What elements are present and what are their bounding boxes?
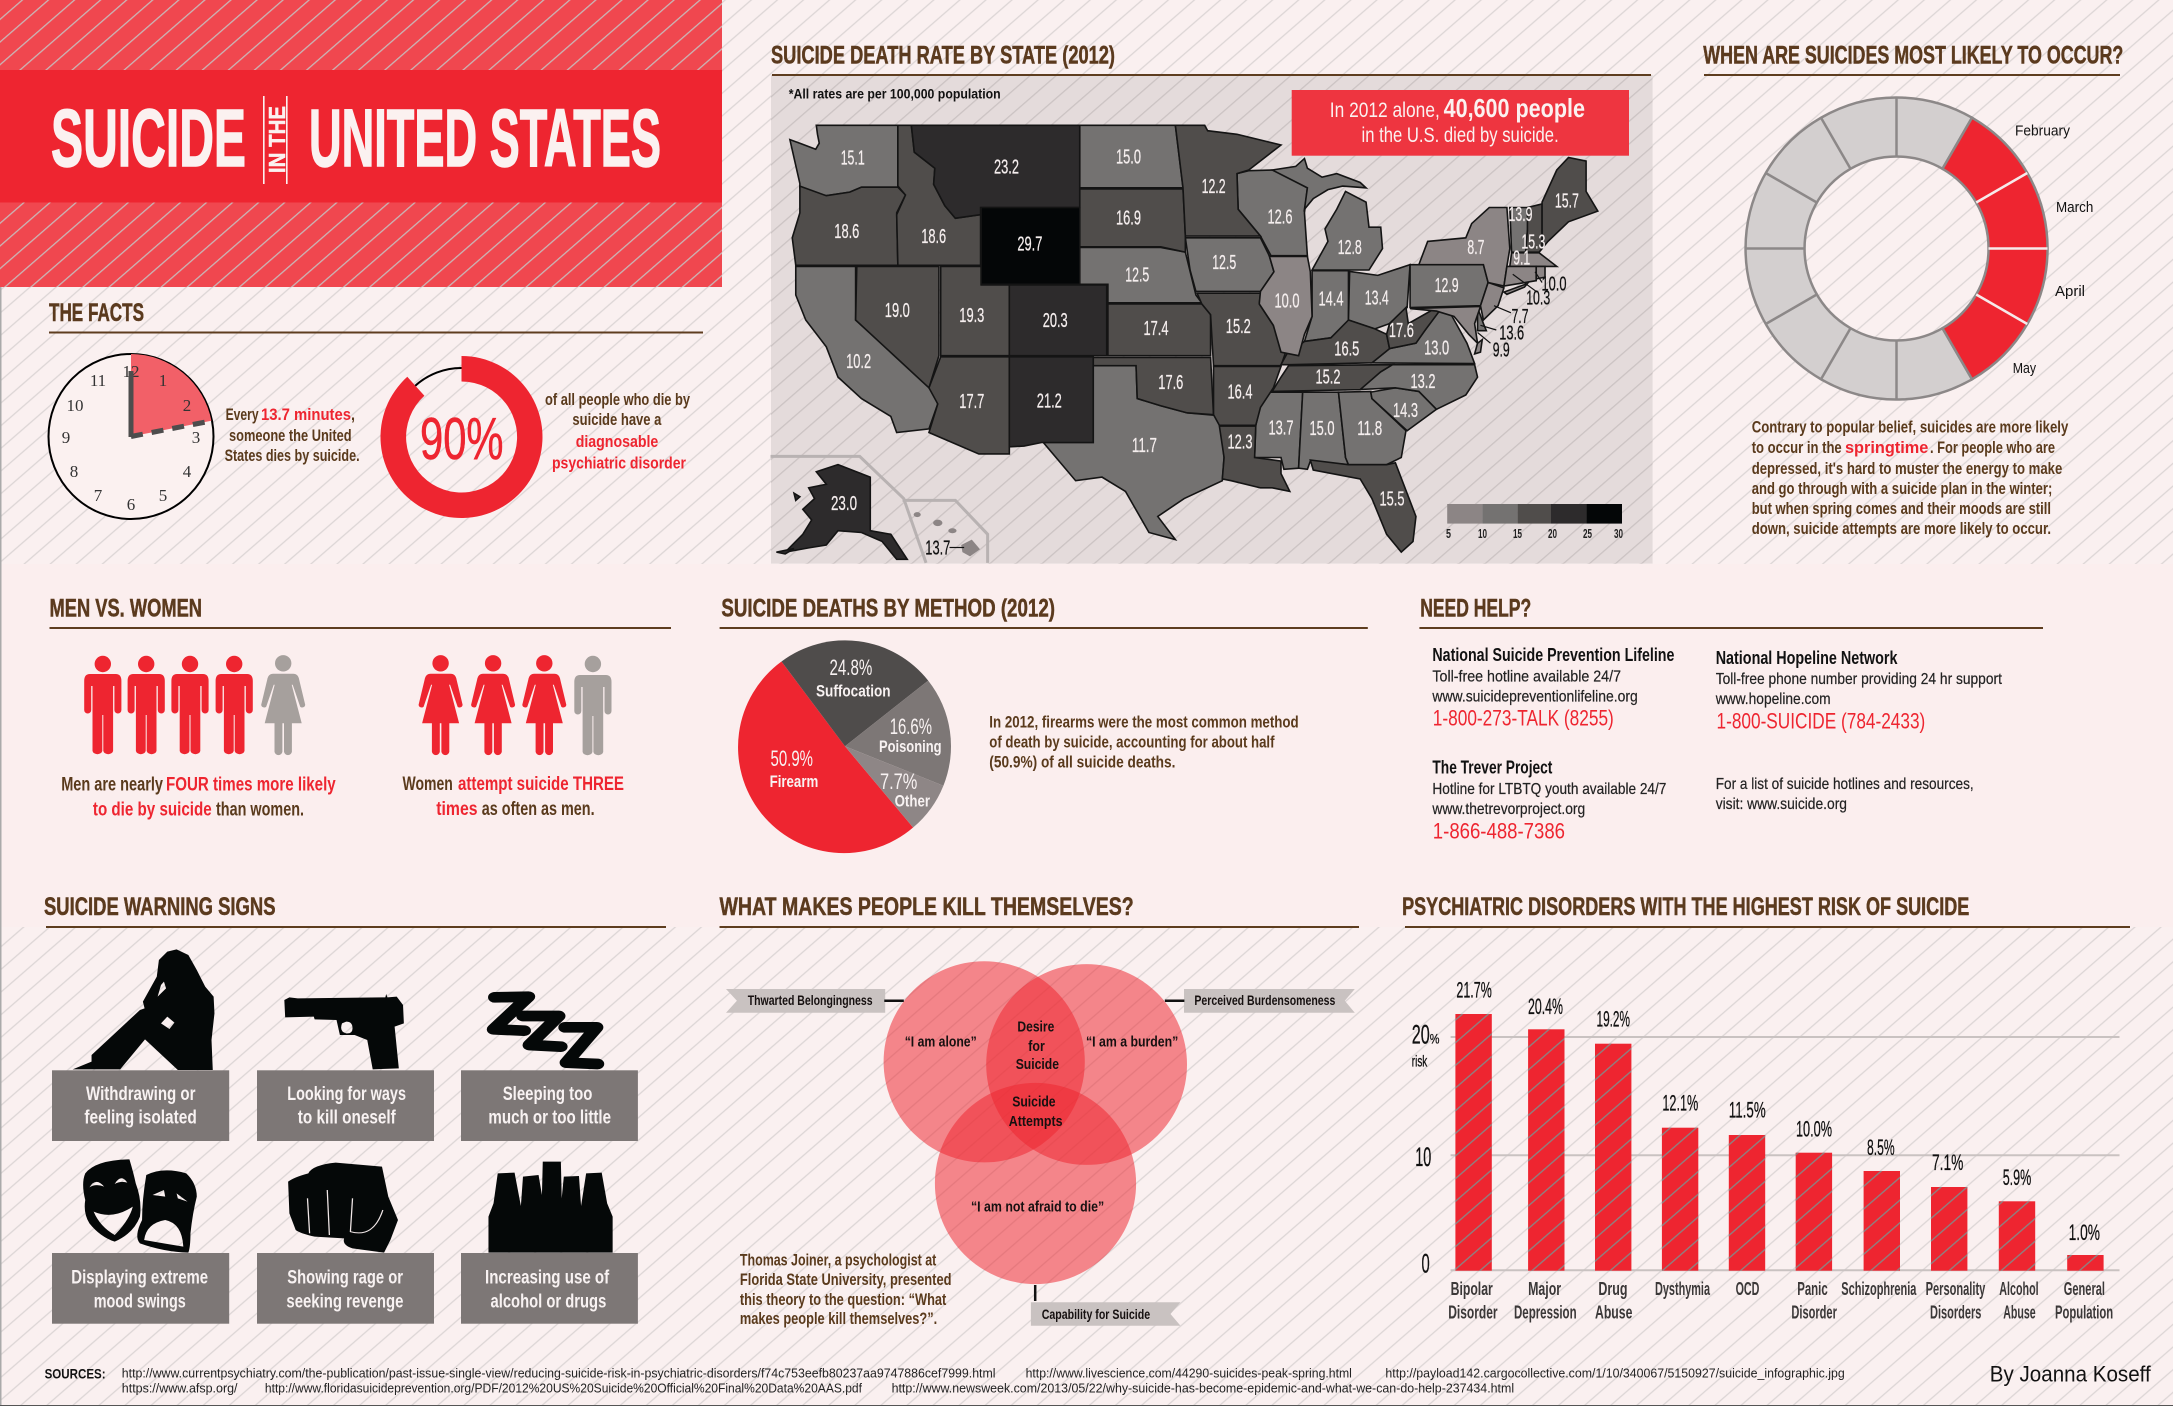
ribbon: thwarted belongingness — [726, 989, 904, 1013]
bar value labels: 5.9% — [2003, 1165, 2031, 1190]
icon: three women one man — [419, 655, 612, 755]
map: inset borders and hawaii — [771, 272, 1542, 563]
map: state rate labels: 14.3 — [1393, 400, 1418, 422]
text: firearms explanation: of death by suicide, accounting for about half — [989, 733, 1275, 752]
chart: method pie: Firearm — [770, 772, 818, 791]
card: withdrawing: feeling isolated — [84, 1107, 197, 1128]
panel: the facts — [48, 299, 703, 519]
icon: clock: 11 — [90, 371, 106, 390]
map: state rate labels: 16.5 — [1334, 339, 1359, 361]
text: thomas joiner: Florida State University, presented — [740, 1270, 952, 1289]
chart: venn diagram: “I am a burden” — [1086, 1034, 1178, 1051]
sources: http://www.newsweek.com/2013/05/22/why-suicide-has-become-epidemic-and-what-we-can-do-help-237434.html — [892, 1380, 1514, 1395]
icon: handgun — [284, 994, 404, 1069]
resource: hopeline network: www.hopeline.com — [1715, 691, 1831, 708]
chart: method pie: Other — [895, 792, 930, 811]
text: psychiatric disorder: of all people who die by — [545, 390, 690, 409]
heading: deaths by method: SUICIDE DEATHS BY METHOD (2012) — [721, 595, 1055, 623]
ribbon: thwarted belongingness: Thwarted Belongingness — [748, 992, 873, 1008]
heading: psychiatric disorders: PSYCHIATRIC DISORDERS WITH THE HIGHEST RISK OF SUICIDE — [1402, 893, 1969, 921]
text: psychiatric disorder — [545, 390, 690, 473]
bar category labels — [1448, 1279, 2113, 1322]
text: psychiatric disorder: diagnosable — [576, 432, 658, 451]
text: every 13.7 minutes: States dies by suicide. — [225, 446, 360, 465]
card: sleeping — [461, 1070, 638, 1141]
map: state rate labels: 13.0 — [1424, 338, 1449, 360]
icon: clock — [48, 354, 214, 519]
map: state rate labels: 12.5 — [1212, 252, 1236, 274]
map: state rate labels: 14.4 — [1318, 289, 1344, 311]
text: men four times: to die by suicide — [93, 800, 212, 821]
text: firearms explanation: In 2012, firearms were the most common method — [989, 713, 1299, 732]
bar value labels: 11.5% — [1729, 1098, 1766, 1123]
text: every 13.7 minutes — [225, 405, 360, 465]
resource: trevor project: www.thetrevorproject.org — [1432, 801, 1585, 818]
heading: warning signs: SUICIDE WARNING SIGNS — [44, 893, 276, 921]
resource: trevor project: 1-866-488-7386 — [1433, 818, 1565, 843]
heading: what makes people: WHAT MAKES PEOPLE KILL THEMSELVES? — [720, 893, 1134, 921]
bar value labels: 10.0% — [1796, 1117, 1832, 1142]
map: state rate labels: 18.6 — [834, 221, 859, 243]
heading: death rate by state: SUICIDE DEATH RATE BY STATE (2012) — [771, 42, 1115, 70]
heading: need help: NEED HELP? — [1420, 595, 1531, 623]
icon: isolated person — [73, 949, 214, 1070]
heading: the facts: THE FACTS — [49, 299, 144, 327]
map: state rate labels: 12.8 — [1338, 237, 1362, 259]
heading: men vs women: MEN VS. WOMEN — [50, 595, 202, 623]
bar value labels: 7.1% — [1932, 1150, 1963, 1175]
card: looking for ways — [257, 1070, 434, 1141]
map: state rate labels: 16.4 — [1228, 382, 1252, 404]
map: state rate labels: 23.0 — [831, 493, 857, 515]
icon: clock: 12 — [122, 362, 140, 381]
map: state rate labels: 29.7 — [1017, 233, 1042, 255]
axis labels: 0 — [1422, 1249, 1430, 1279]
text: every 13.7 minutes: someone the United — [229, 426, 352, 445]
map: state rate labels: 17.6 — [1158, 372, 1183, 394]
chart: 90 percent ring — [380, 356, 542, 518]
card: looking for ways: Looking for ways — [287, 1084, 406, 1105]
map: state rate labels: 10.0 — [1542, 273, 1566, 295]
sources: http://www.currentpsychiatry.com/the-publication/past-issue-single-view/reducing-suicide-risk-in-psychiatric-disorders/f74c753eefb80237aa9747886cef7999.html — [122, 1365, 996, 1380]
panel: warning signs — [44, 893, 666, 1324]
map: state rate labels: 17.4 — [1144, 318, 1168, 340]
map: state rate labels: 9.9 — [1493, 339, 1510, 361]
labels: months: April — [2055, 283, 2085, 300]
resource: prevention lifeline — [1432, 645, 1674, 731]
map: state rate labels — [831, 147, 1579, 560]
bar value labels: 19.2% — [1596, 1007, 1630, 1032]
card: mood swings — [52, 1253, 229, 1324]
map: state rate labels: 12.3 — [1228, 432, 1252, 454]
icon: fist — [288, 1163, 398, 1253]
resource: suicide.org — [1716, 776, 1974, 813]
text: springtime explanation: down, suicide attempts are more likely to occur. — [1752, 519, 2051, 538]
bar category labels: Abuse — [1595, 1302, 1632, 1322]
bar value labels: 8.5% — [1867, 1135, 1895, 1160]
bar category labels: Drug — [1598, 1279, 1628, 1299]
ribbon: perceived burdensomeness — [1165, 989, 1355, 1013]
map: state rate labels: 20.3 — [1043, 310, 1068, 332]
map: state rate labels: 17.7 — [959, 391, 984, 413]
resource: hopeline network: National Hopeline Network — [1716, 648, 1898, 668]
bar value labels — [1456, 977, 2100, 1245]
panel: men vs women — [50, 595, 671, 821]
text: men four times: FOUR times more likely — [166, 775, 336, 796]
legend: rate scale: 10 — [1478, 526, 1487, 541]
note: rates per 100,000: *All rates are per 100,000 population — [789, 86, 1001, 102]
bar category labels: Personality — [1926, 1279, 1985, 1299]
icon: clock: 2 — [183, 396, 191, 415]
panel: when are suicides most likely — [1703, 42, 2123, 538]
resource: hopeline network: 1-800-SUICIDE (784-2433) — [1716, 708, 1925, 733]
card: alcohol or drugs: alcohol or drugs — [490, 1291, 606, 1312]
map: state rate labels: 17.6 — [1389, 320, 1414, 342]
text: women three times: attempt suicide THREE — [458, 774, 624, 795]
ribbon: capability for suicide: Capability for Suicide — [1042, 1306, 1150, 1322]
legend: rate scale: 20 — [1548, 526, 1557, 541]
text: women three times: as often as men. — [482, 799, 595, 820]
bar category labels: Alcohol — [1999, 1279, 2039, 1299]
icon: clock: 8 — [70, 462, 78, 481]
bar category labels: Abuse — [2003, 1302, 2036, 1322]
map: state rate labels: 15.0 — [1116, 147, 1141, 169]
chart: method pie: Poisoning — [879, 737, 942, 756]
chart: venn diagram: “I am alone” — [905, 1034, 977, 1051]
panel: what makes people kill themselves — [720, 893, 1359, 1328]
chart: method pie: 24.8% — [830, 655, 872, 680]
map: state rate labels: 9.1 — [1513, 248, 1530, 270]
chart: risk bars — [1451, 1014, 2120, 1271]
sources: SOURCES: — [45, 1365, 106, 1381]
map: state rate labels: 15.3 — [1521, 232, 1545, 254]
map: state rate labels: 19.3 — [959, 305, 984, 327]
map: state rate labels: 12.6 — [1268, 207, 1292, 229]
chart: venn diagram: Suicide — [1016, 1056, 1059, 1073]
map: state rate labels: 13.6 — [1499, 323, 1524, 345]
axis labels: risk — [1412, 1054, 1428, 1071]
map: state rate labels: 8.7 — [1467, 237, 1484, 259]
bar category labels: Schizophrenia — [1841, 1279, 1917, 1299]
axis labels: % — [1430, 1030, 1439, 1046]
text: springtime explanation: depressed, it's hard to muster the energy to make — [1752, 459, 2062, 478]
map: state rate labels: 18.6 — [921, 226, 946, 248]
card: sleeping: Sleeping too — [503, 1084, 592, 1105]
icon: clock: 10 — [66, 396, 84, 415]
chart: venn diagram — [884, 961, 1187, 1284]
card: rage: Showing rage or — [287, 1267, 403, 1288]
text: men four times: Men are nearly — [61, 775, 163, 796]
text: psychiatric disorder: psychiatric disorder — [552, 454, 686, 473]
chart: method pie — [738, 640, 951, 853]
map: state rate labels: 19.0 — [885, 300, 910, 322]
icon: clock: 6 — [127, 495, 135, 514]
callout: 40,600 people: in the U.S. died by suicide. — [1362, 124, 1559, 147]
legend: rate scale: 30 — [1614, 526, 1623, 541]
resource: trevor project — [1432, 757, 1666, 843]
panel: need help — [1419, 595, 2043, 843]
resource: prevention lifeline: National Suicide Prevention Lifeline — [1432, 645, 1674, 665]
icon: clock: 7 — [94, 486, 103, 505]
bar category labels: Disorders — [1930, 1302, 1981, 1322]
resource: prevention lifeline: Toll-free hotline available 24/7 — [1432, 669, 1621, 686]
chart: venn diagram: “I am not afraid to die” — [971, 1199, 1104, 1216]
map: state rate labels: 10.2 — [846, 351, 871, 373]
bar value labels: 1.0% — [2069, 1220, 2100, 1245]
icon: clock: 9 — [62, 428, 70, 447]
text: springtime explanation: but when spring comes and their moods are still — [1752, 499, 2051, 518]
labels: months: May — [2013, 360, 2036, 377]
bar value labels: 20.4% — [1528, 994, 1563, 1019]
panel: suicide death rate by state — [771, 42, 1653, 564]
sources: http://www.floridasuicideprevention.org/PDF/2012%20US%20Suicide%20Official%20Final%20Data%20AAS.pdf — [265, 1380, 862, 1395]
chart: monthly donut — [1746, 97, 2048, 399]
icon: bottles — [488, 1162, 613, 1253]
resource: trevor project: Hotline for LTBTQ youth available 24/7 — [1432, 781, 1666, 798]
sources: http://www.livescience.com/44290-suicides-peak-spring.html — [1026, 1365, 1352, 1380]
text: every 13.7 minutes: , — [351, 405, 355, 424]
text: springtime explanation: to occur in the — [1752, 438, 1842, 457]
chart: method pie: 16.6% — [890, 714, 932, 739]
text: firearms explanation: (50.9%) of all suicide deaths. — [989, 753, 1175, 772]
card: withdrawing: Withdrawing or — [86, 1084, 196, 1105]
title: suicide: SUICIDE — [51, 93, 246, 184]
icon: theatre masks — [83, 1159, 197, 1253]
bar value labels: 21.7% — [1456, 977, 1492, 1002]
chart: 90 percent ring: 90% — [420, 406, 504, 472]
legend: rate scale: 5 — [1446, 526, 1451, 541]
chart: method pie: 7.7% — [880, 769, 917, 794]
map: state rate labels: 15.7 — [1555, 190, 1579, 212]
bar category labels: Dysthymia — [1655, 1279, 1711, 1299]
map: state rate labels: 13.4 — [1365, 288, 1389, 310]
map: state rate labels: 10.3 — [1526, 288, 1550, 310]
map: state shapes — [776, 125, 1598, 559]
text: thomas joiner: Thomas Joiner, a psychologist at — [740, 1251, 937, 1270]
title: in the: IN THE — [264, 106, 290, 173]
bar category labels: Population — [2055, 1302, 2113, 1322]
card: looking for ways: to kill oneself — [298, 1107, 396, 1128]
bar category labels: OCD — [1736, 1279, 1759, 1299]
panel: psychiatric disorders — [1402, 893, 2130, 1322]
card: withdrawing — [52, 1070, 229, 1141]
card: sleeping: much or too little — [488, 1107, 611, 1128]
resource: trevor project: The Trever Project — [1432, 757, 1552, 777]
title: united states: UNITED STATES — [309, 93, 661, 184]
map: state rate labels: 15.1 — [841, 148, 865, 170]
text: thomas joiner — [740, 1251, 952, 1328]
chart: venn diagram: for — [1028, 1038, 1045, 1055]
bar category labels: Depression — [1514, 1302, 1577, 1322]
sources — [45, 1365, 1845, 1395]
text: every 13.7 minutes: 13.7 minutes — [261, 405, 351, 424]
map: state rate labels: 15.2 — [1316, 367, 1340, 389]
map: state rate labels: 11.7 — [1132, 435, 1157, 457]
sources: https://www.afsp.org/ — [122, 1380, 238, 1395]
card: alcohol or drugs: Increasing use of — [485, 1267, 610, 1288]
legend: rate scale — [1446, 504, 1623, 541]
text: firearms explanation — [989, 713, 1299, 772]
chart: venn diagram: Suicide — [1012, 1094, 1056, 1111]
axis labels: 10 — [1415, 1142, 1431, 1172]
labels: months: February — [2015, 122, 2070, 139]
text: springtime explanation: springtime — [1845, 438, 1928, 457]
map: state rate labels: 13.2 — [1410, 371, 1436, 393]
labels: months — [2013, 122, 2093, 377]
panel: title banner — [0, 0, 722, 287]
text: men four times — [61, 775, 336, 821]
icon: four men one woman — [84, 655, 305, 755]
ribbon: capability for suicide — [1031, 1285, 1180, 1326]
icon: clock: 4 — [183, 462, 192, 481]
card: alcohol or drugs — [461, 1253, 638, 1324]
text: psychiatric disorder: suicide have a — [572, 410, 662, 429]
card: rage: seeking revenge — [286, 1291, 403, 1312]
text: springtime explanation — [1752, 418, 2069, 538]
ribbon: perceived burdensomeness: Perceived Burdensomeness — [1194, 992, 1335, 1008]
chart: method pie: Suffocation — [816, 682, 891, 701]
callout: 40,600 people: 40,600 people — [1444, 93, 1585, 123]
map: state rate labels: 16.9 — [1116, 208, 1141, 230]
map: state rate labels: 13.9 — [1508, 204, 1532, 226]
text: every 13.7 minutes: Every — [226, 405, 259, 424]
resource: hopeline network — [1715, 648, 2002, 733]
map: state rate labels: 21.2 — [1037, 390, 1062, 412]
resource: suicide.org: For a list of suicide hotlines and resources, — [1716, 776, 1974, 793]
callout: 40,600 people: In 2012 alone, — [1330, 99, 1440, 122]
legend: rate scale: 15 — [1513, 526, 1522, 541]
resource: prevention lifeline: www.suicidepreventionlifeline.org — [1432, 689, 1638, 706]
resource: suicide.org: visit: www.suicide.org — [1716, 796, 1847, 813]
axis labels: 20 — [1412, 1019, 1430, 1049]
map: state rate labels: 15.2 — [1226, 316, 1251, 338]
map: state rate labels: 23.2 — [994, 157, 1019, 179]
card: rage — [257, 1253, 434, 1324]
resource: hopeline network: Toll-free phone number providing 24 hr support — [1716, 671, 2002, 688]
bar category labels: General — [2064, 1279, 2105, 1299]
icon: clock: 1 — [159, 371, 167, 390]
text: thomas joiner: this theory to the question: “What — [740, 1290, 947, 1309]
legend: rate scale: 25 — [1583, 526, 1592, 541]
text: springtime explanation: . For people who are — [1930, 438, 2055, 457]
chart: venn diagram: Desire — [1017, 1019, 1054, 1036]
byline: By Joanna Koseff — [1990, 1362, 2152, 1387]
chart: method pie: 50.9% — [770, 746, 813, 771]
map: state rate labels: 12.5 — [1125, 264, 1149, 286]
card: mood swings: mood swings — [94, 1291, 186, 1312]
sources: http://payload142.cargocollective.com/1/10/340067/5150927/suicide_infographic.jpg — [1385, 1365, 1845, 1380]
panel: deaths by method — [720, 595, 1368, 853]
chart: venn diagram: Attempts — [1009, 1113, 1062, 1130]
bar category labels: Disorder — [1791, 1302, 1837, 1322]
labels: months: March — [2056, 199, 2093, 216]
icon: sleeping zzz — [494, 997, 597, 1064]
icon: clock: 5 — [159, 486, 167, 505]
text: women three times: times — [436, 799, 478, 820]
bar category labels: Panic — [1797, 1279, 1828, 1299]
text: men four times: than women. — [216, 800, 304, 821]
map: state rate labels: 11.8 — [1357, 418, 1382, 440]
map: state rate labels: 12.9 — [1435, 275, 1459, 297]
map: state rate labels: 15.0 — [1310, 418, 1334, 440]
callout: 40,600 people — [1292, 90, 1629, 156]
bar category labels: Bipolar — [1451, 1279, 1493, 1299]
bar category labels: Major — [1528, 1279, 1561, 1299]
bar category labels: Disorder — [1448, 1302, 1498, 1322]
icon: clock: 3 — [192, 428, 200, 447]
map: state rate labels: 13.7 — [925, 538, 950, 560]
axis labels — [1412, 1019, 1439, 1279]
map: state rate labels: 7.7 — [1512, 306, 1528, 328]
card: mood swings: Displaying extreme — [71, 1267, 208, 1288]
text: women three times: Women — [402, 774, 453, 795]
text: springtime explanation: and go through with a suicide plan in the winter; — [1752, 479, 2052, 498]
map: state rate labels: 12.2 — [1202, 176, 1226, 198]
text: springtime explanation: Contrary to popular belief, suicides are more likely — [1752, 418, 2069, 436]
map: state rate labels: 10.0 — [1274, 290, 1300, 312]
resource: prevention lifeline: 1-800-273-TALK (8255) — [1433, 706, 1614, 731]
map: state rate labels: 15.5 — [1380, 489, 1404, 511]
map: state rate labels: 13.7 — [1268, 417, 1294, 439]
bar value labels: 12.1% — [1662, 1091, 1698, 1116]
text: women three times — [402, 774, 624, 820]
text: thomas joiner: makes people kill themselves?”. — [740, 1309, 937, 1328]
